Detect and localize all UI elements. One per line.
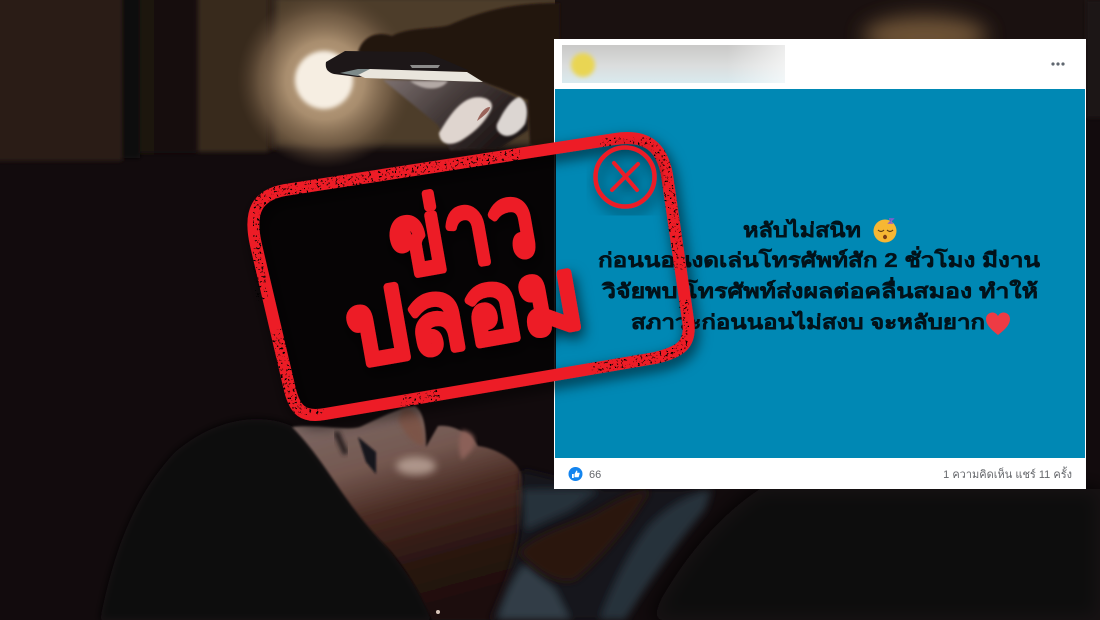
like count: 66 [589, 469, 601, 481]
hand holding phone [358, 3, 560, 152]
stamp frame wear [253, 138, 689, 415]
stamp dark interior [253, 148, 556, 415]
post header: blurred account name [562, 45, 785, 83]
left wall and window frame [0, 0, 275, 161]
post message text: ก่อนนอนงดเล่นโทรศัพท์สัก 2 ชั่วโมง มีงาน [598, 245, 1040, 272]
face and neck [292, 406, 523, 620]
icon: post menu dots [1051, 62, 1065, 66]
post message text [598, 218, 1040, 334]
dark blanket [659, 496, 750, 604]
stamp headline: ปลอม [338, 237, 590, 388]
sweater and collar [490, 470, 712, 620]
stamp frame [253, 138, 689, 415]
icon: like badge [568, 467, 582, 481]
panel: social media post [554, 39, 1086, 489]
lit wall behind the lamp [237, 0, 564, 168]
post footer [568, 466, 1072, 481]
post card [554, 39, 1086, 489]
hair bun tail [518, 490, 650, 581]
hair [102, 419, 288, 612]
upper right wall [555, 0, 1100, 118]
comments and shares: 1 ความคิดเห็น แชร์ 11 ครั้ง [943, 466, 1072, 481]
glowing palm and fingers [383, 80, 528, 150]
stamp headline [338, 164, 590, 388]
icon: red heart emoji [986, 312, 1010, 335]
post message text: วิจัยพบ โทรศัพท์ส่งผลต่อคลื่นสมอง ทำให้ [601, 276, 1038, 303]
stamp headline: ข่าว [380, 164, 544, 299]
icon: sleeping face emoji [874, 219, 896, 242]
icon: circled X [596, 148, 654, 206]
phone [326, 51, 483, 82]
post message text: สภาวะก่อนนอนไม่สงบ จะหลับยาก [631, 310, 985, 334]
post image background [555, 89, 1085, 458]
earring [436, 610, 440, 614]
lamp [295, 51, 353, 109]
post message text: หลับไม่สนิท [743, 218, 861, 242]
stamp: fake news [253, 138, 689, 415]
